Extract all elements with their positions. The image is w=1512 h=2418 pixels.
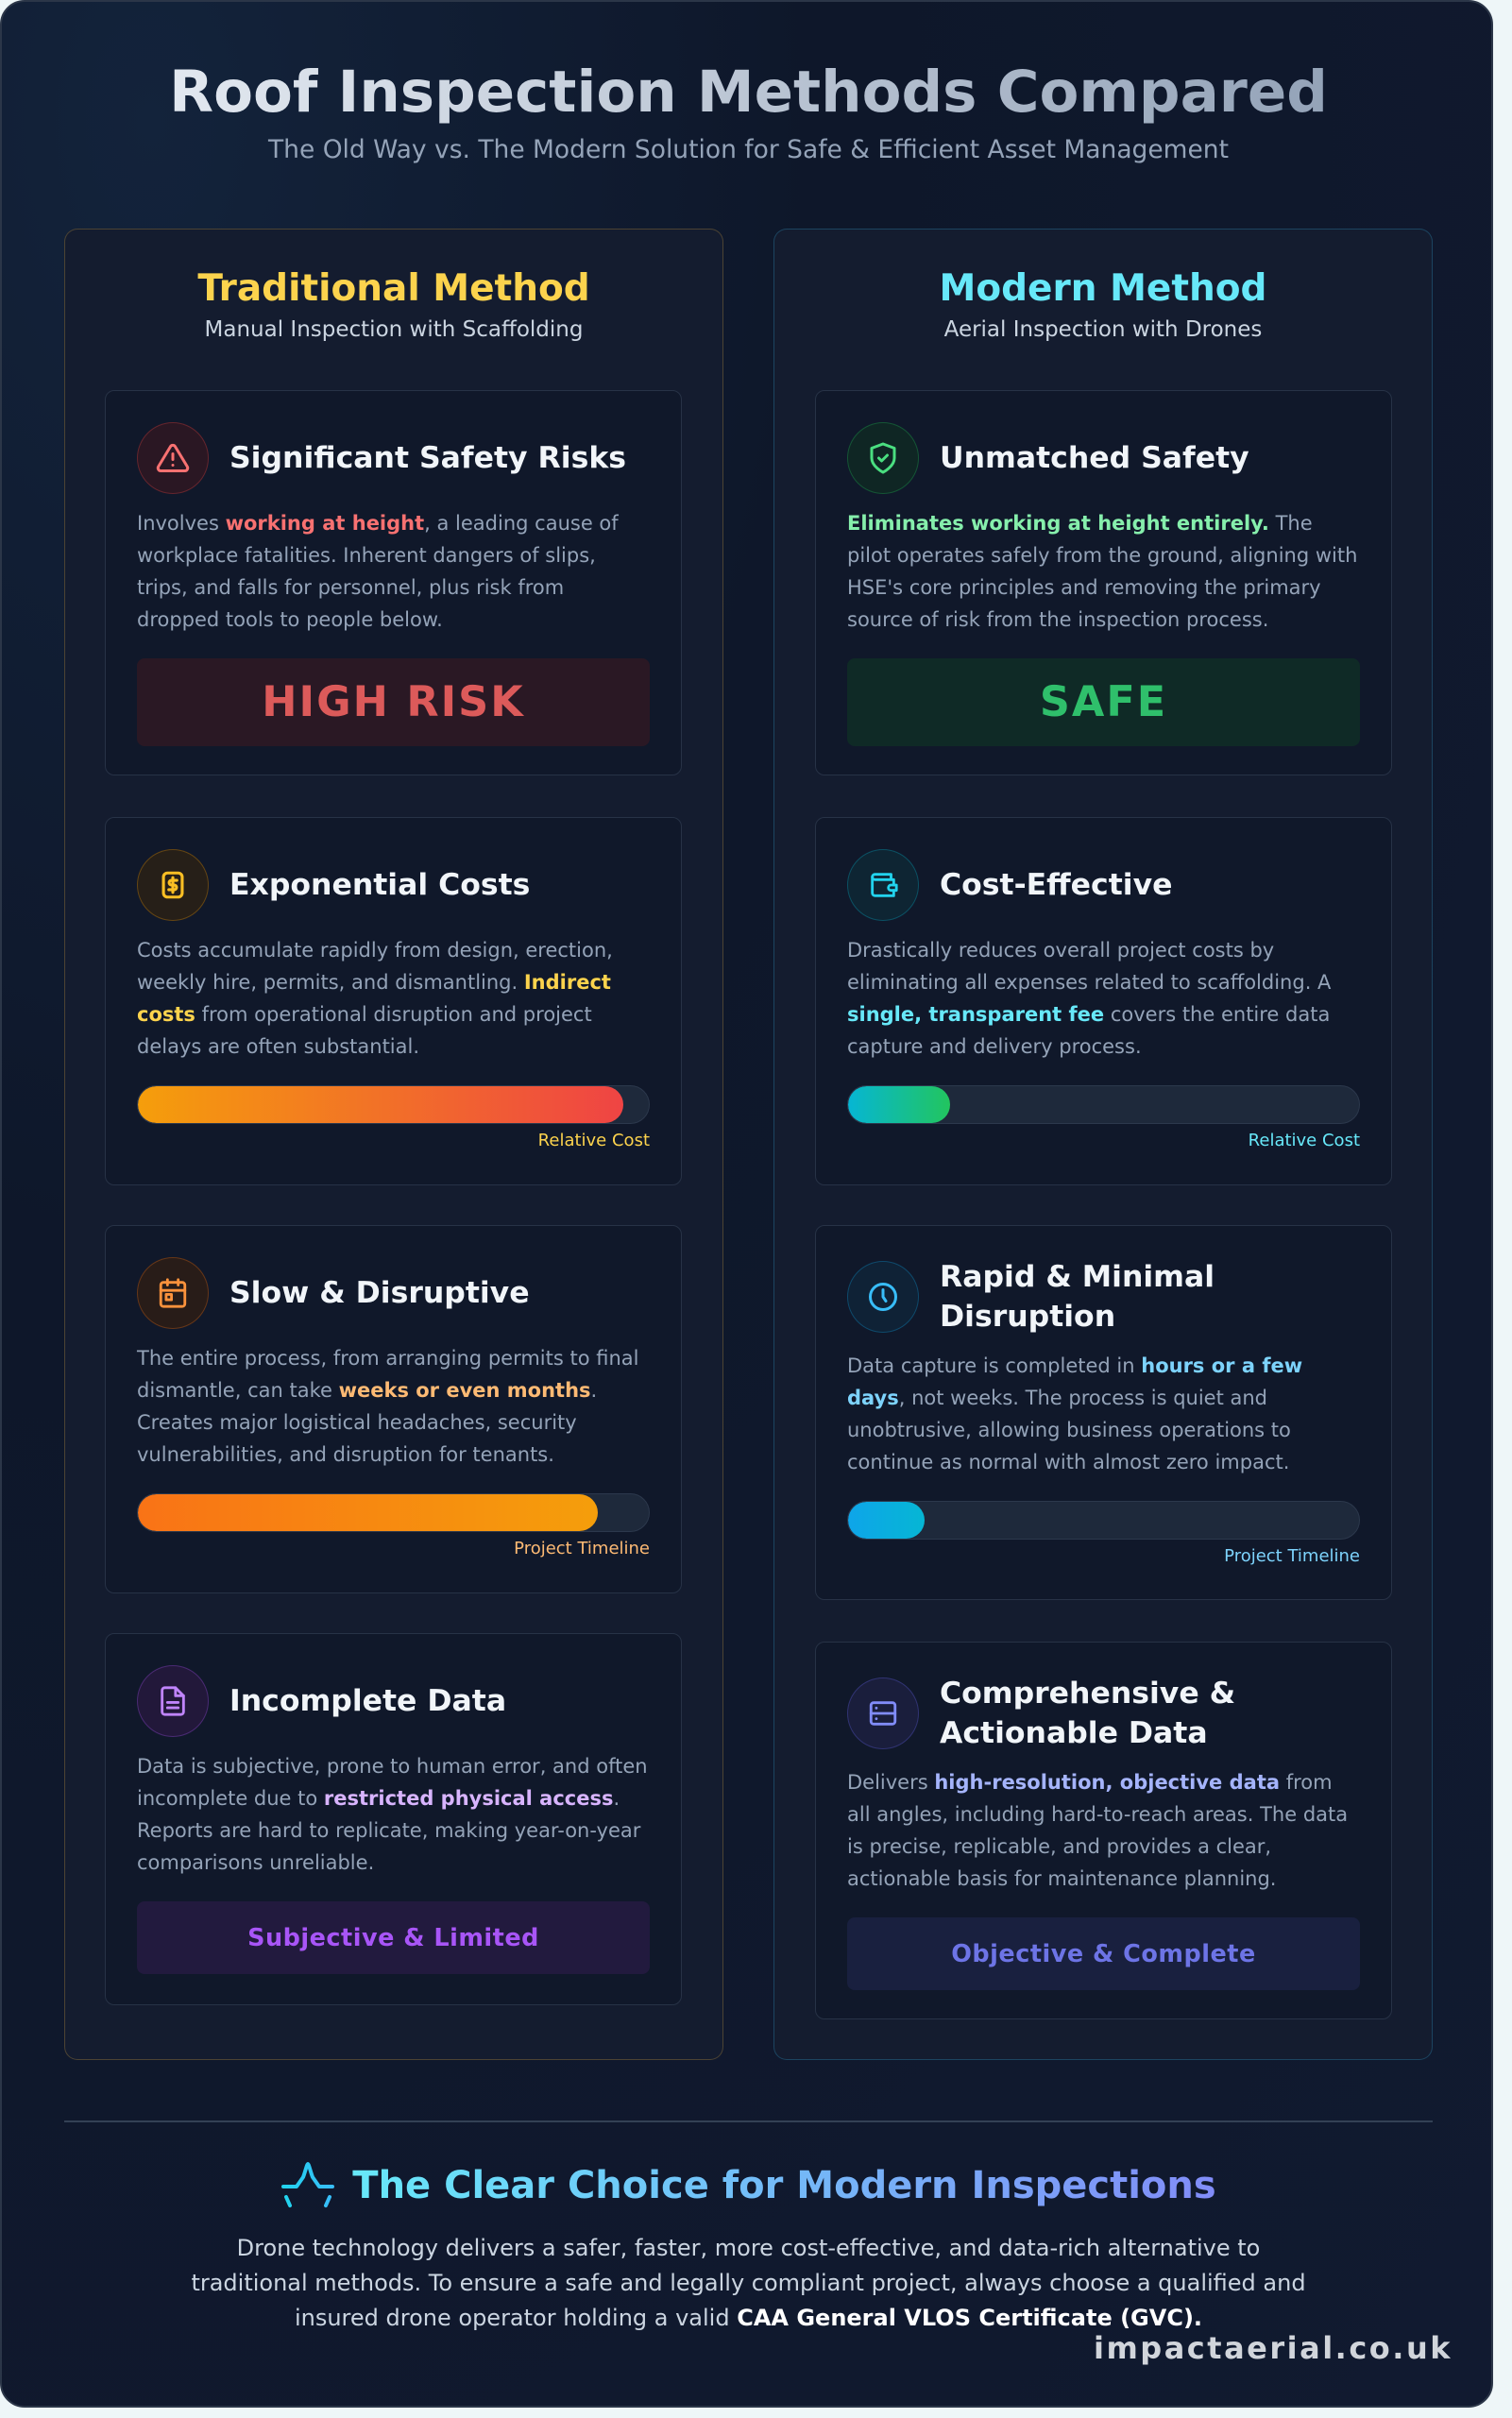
panel heading: modern: Modern Method	[940, 267, 1266, 310]
card heading with document icon	[137, 1665, 506, 1737]
badge: subjective and limited	[137, 1901, 650, 1974]
card heading with clock icon	[847, 1260, 1215, 1334]
card heading with clock icon: Disruption	[940, 1300, 1115, 1334]
badge: high risk: HIGH RISK	[262, 678, 525, 726]
card: cost-effective	[815, 817, 1392, 1185]
panel heading: traditional: Traditional Method	[197, 267, 590, 310]
footer paragraph: traditional methods. To ensure a safe and legally compliant project, always choose a qualified and	[191, 2270, 1306, 2296]
bar: relative cost low	[847, 1085, 1360, 1124]
body text: Data capture is completed in hours or a few days, not weeks. The process is quiet and unobtrusive, allowing business operations to continue as normal with almost zero impact.	[847, 1354, 1302, 1473]
bar: relative cost high	[137, 1085, 650, 1124]
body text: Data is subjective, prone to human error, and often incomplete due to restricted physical access. Reports are hard to replicate, making year-on-year comparisons unreliable.	[137, 1755, 648, 1874]
card heading with calendar icon: Slow & Disruptive	[229, 1276, 530, 1310]
icon: drone signal	[281, 2162, 334, 2208]
card heading with shield icon: Unmatched Safety	[940, 441, 1249, 475]
card heading with document icon: Incomplete Data	[229, 1684, 506, 1718]
body text: Drastically reduces overall project costs by eliminating all expenses related to scaffolding. A single, transparent fee covers the entire data capture and delivery process.	[847, 939, 1331, 1058]
body text: The entire process, from arranging permits to final dismantle, can take weeks or even months. Creates major logistical headaches, security vulnerabilities, and disruption for tenants.	[137, 1347, 638, 1466]
title: Roof Inspection Methods Compared	[169, 59, 1328, 126]
panel heading: traditional: Manual Inspection with Scaffolding	[205, 317, 583, 342]
panel heading: modern	[940, 267, 1266, 342]
card heading with server icon: Actionable Data	[940, 1716, 1208, 1750]
footer paragraph: insured drone operator holding a valid CAA General VLOS Certificate (GVC).	[295, 2305, 1202, 2331]
panel: modern method	[773, 229, 1433, 2060]
bar: timeline short	[847, 1501, 1360, 1540]
footer paragraph	[191, 2235, 1306, 2331]
card heading with wallet icon: Cost-Effective	[940, 868, 1172, 902]
card: incomplete data	[105, 1633, 682, 2005]
card: significant safety risks	[105, 390, 682, 775]
card heading with server icon: Comprehensive &	[940, 1677, 1235, 1711]
card heading with calendar icon	[137, 1257, 530, 1329]
panel heading: modern: Aerial Inspection with Drones	[944, 317, 1262, 342]
badge: high risk	[137, 658, 650, 746]
body text: Eliminates working at height entirely. The pilot operates safely from the ground, aligning with HSE's core principles and removing the primary source of risk from the inspection process.	[847, 512, 1357, 631]
card: unmatched safety	[815, 390, 1392, 775]
badge: safe	[847, 658, 1360, 746]
body text: Involves working at height, a leading cause of workplace fatalities. Inherent dangers of slips, trips, and falls for personnel, plus risk from dropped tools to people below.	[137, 512, 619, 631]
badge: safe: SAFE	[1040, 678, 1167, 726]
badge: subjective and limited: Subjective & Limited	[247, 1923, 539, 1951]
card: exponential costs	[105, 817, 682, 1185]
body text: Delivers high-resolution, objective data from all angles, including hard-to-reach areas. The data is precise, replicable, and provides a clear, actionable basis for maintenance planning.	[847, 1771, 1348, 1890]
card: slow and disruptive	[105, 1225, 682, 1593]
watermark: impactaerial.co.uk	[1094, 2330, 1453, 2366]
card heading with wallet icon	[847, 849, 1172, 921]
subtitle: The Old Way vs. The Modern Solution for Safe & Efficient Asset Management	[268, 135, 1229, 164]
card: comprehensive and actionable data	[815, 1642, 1392, 2019]
card heading with warning icon	[137, 422, 626, 494]
footer heading with drone icon: The Clear Choice for Modern Inspections	[352, 2164, 1216, 2207]
bar label: Relative Cost	[1249, 1131, 1360, 1150]
body text: Costs accumulate rapidly from design, erection, weekly hire, permits, and dismantling. Indirect costs from operational disruption and project delays are often substantial.	[137, 939, 613, 1058]
panel heading: traditional	[197, 267, 590, 342]
card heading with clock icon: Rapid & Minimal	[940, 1260, 1215, 1294]
card: rapid and minimal disruption	[815, 1225, 1392, 1600]
bar label: Project Timeline	[1224, 1546, 1360, 1566]
footer paragraph: Drone technology delivers a safer, faster, more cost-effective, and data-rich alternative to	[237, 2235, 1260, 2261]
panel: traditional method	[64, 229, 723, 2060]
badge: objective and complete	[847, 1917, 1360, 1990]
bar label: Relative Cost	[538, 1131, 650, 1150]
card heading with shield icon	[847, 422, 1249, 494]
card heading with warning icon: Significant Safety Risks	[229, 441, 626, 475]
card heading with server icon	[847, 1677, 1235, 1750]
card heading with dollar icon	[137, 849, 530, 921]
card heading with dollar icon: Exponential Costs	[229, 868, 530, 902]
bar: timeline long	[137, 1493, 650, 1532]
bar label: Project Timeline	[514, 1539, 650, 1558]
badge: objective and complete: Objective & Complete	[951, 1940, 1256, 1968]
